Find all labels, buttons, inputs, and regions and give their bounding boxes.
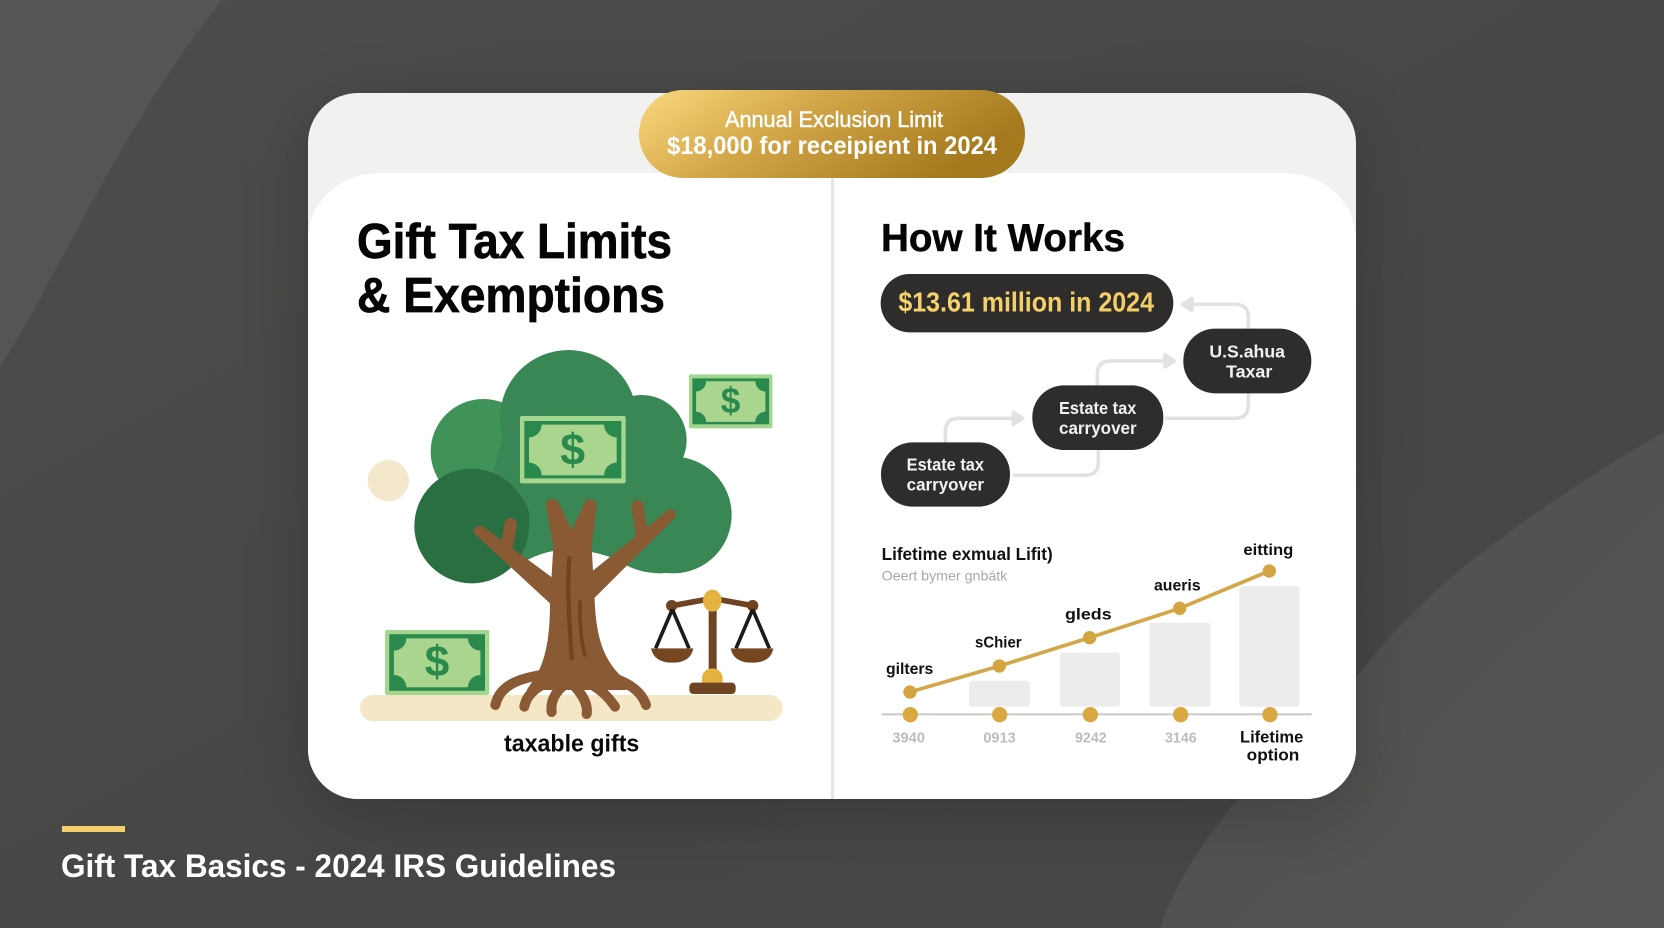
flow diagram: [881, 274, 1311, 507]
icon: dollar bill bottom left: [385, 630, 489, 695]
axis labels: 3940: [892, 731, 925, 747]
node: U.S. taxar: Taxar: [1226, 361, 1272, 381]
node: estate tax carryover middle: [1032, 385, 1163, 450]
title: gift tax limits and exemptions: Gift Tax Limits: [357, 215, 672, 269]
axis label: lifetime option: [1240, 728, 1303, 765]
chart: lifetime bars and line: [882, 542, 1312, 765]
chart title: Lifetime exmual Lifit): [882, 544, 1053, 564]
node: estate tax carryover middle: carryover: [1059, 418, 1137, 438]
title: gift tax limits and exemptions: & Exemptions: [357, 269, 665, 323]
icon: dollar bill in canopy: [520, 416, 626, 483]
axis label: lifetime option: Lifetime: [1240, 728, 1303, 746]
axis labels: [892, 731, 1197, 747]
pill: 13.61 million: $13.61 million in 2024: [898, 287, 1154, 318]
illustration: money tree: [360, 350, 783, 758]
icon: balance scales: [651, 590, 773, 694]
main card: [308, 93, 1356, 799]
connectors and arrows: [945, 298, 1248, 475]
node: estate tax carryover lower: [881, 442, 1010, 507]
axis labels: 9242: [1075, 731, 1107, 747]
point labels: [886, 542, 1293, 678]
bars: [969, 586, 1299, 707]
point labels: gilters: [886, 661, 934, 678]
column divider: [831, 178, 834, 799]
tree canopy: [414, 350, 732, 583]
icon: dollar bill bottom left: $: [425, 639, 449, 687]
point labels: sChier: [975, 634, 1022, 651]
card shadow: [308, 108, 1356, 814]
panel: white content area: [308, 173, 1356, 799]
point labels: gleds: [1065, 606, 1112, 623]
node: U.S. taxar: [1183, 329, 1311, 393]
point labels: eitting: [1243, 542, 1293, 559]
caption: taxable gifts: taxable gifts: [504, 731, 639, 758]
icon: dollar bill top right: [689, 374, 772, 428]
icon: dollar bill top right: $: [721, 381, 741, 421]
node: estate tax carryover lower: carryover: [907, 475, 984, 495]
axis labels: 0913: [983, 731, 1016, 747]
heading: how it works: How It Works: [881, 217, 1125, 260]
node: estate tax carryover lower: Estate tax: [907, 455, 984, 475]
title: gift tax limits and exemptions: [357, 215, 672, 323]
axis label: lifetime option: option: [1247, 747, 1299, 765]
pill: 13.61 million: [881, 274, 1173, 332]
axis labels: 3146: [1165, 731, 1197, 747]
chart subtitle: Oeert bymer gnbátk: [882, 568, 1008, 584]
icon: dollar bill in canopy: $: [560, 425, 585, 474]
node: U.S. taxar: U.S.ahua: [1209, 341, 1286, 361]
node: estate tax carryover middle: Estate tax: [1059, 398, 1136, 418]
badge: annual exclusion limit: Annual Exclusion Limit: [725, 107, 943, 132]
sun circle: [368, 460, 409, 501]
footer accent bar: [62, 826, 125, 832]
footer title: Gift Tax Basics - 2024 IRS Guidelines: [61, 848, 616, 884]
badge: annual exclusion limit: [639, 90, 1025, 178]
point labels: aueris: [1154, 578, 1201, 595]
tree trunk and branches: [473, 499, 676, 714]
axis: [882, 707, 1312, 722]
trend line: [903, 564, 1276, 699]
ground: [360, 695, 783, 721]
badge: annual exclusion limit: $18,000 for receipient in 2024: [667, 132, 997, 160]
